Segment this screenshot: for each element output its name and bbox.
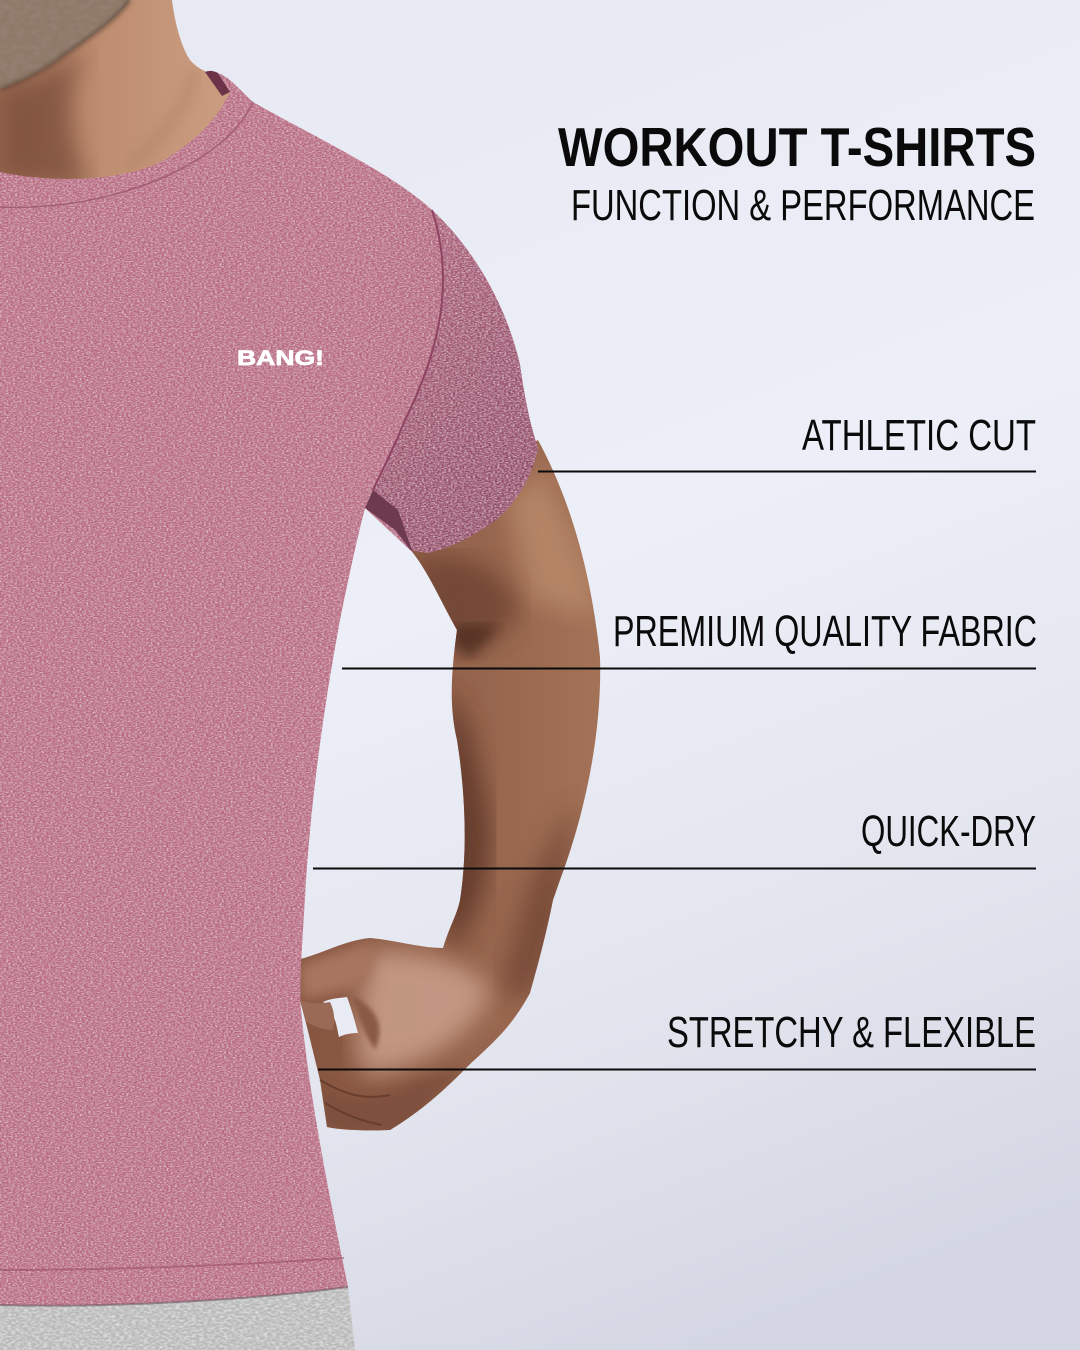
sleeve seam xyxy=(373,210,443,490)
index finger xyxy=(300,945,373,1000)
beard xyxy=(0,0,130,89)
thumb base xyxy=(352,995,379,1050)
forearm and hand xyxy=(290,430,610,1140)
finger creases xyxy=(320,1080,390,1125)
logo: BANG! xyxy=(237,347,324,370)
back of collar xyxy=(205,71,230,96)
shorts xyxy=(0,1287,355,1350)
finger gap xyxy=(323,997,358,1037)
upper arm highlight xyxy=(505,470,596,620)
under-sleeve fold xyxy=(365,490,413,553)
t-shirt xyxy=(0,71,538,1306)
lower hand shadow xyxy=(321,1070,464,1130)
forearm inner shadow xyxy=(440,690,491,950)
elbow crook shadow xyxy=(410,557,520,650)
sleeve xyxy=(373,210,538,553)
hem seam xyxy=(0,1258,344,1270)
photo: model xyxy=(0,0,610,1350)
neck and chin xyxy=(0,0,230,179)
collar seam xyxy=(0,102,253,207)
back of hand highlight xyxy=(356,950,490,1075)
forearm outer shadow xyxy=(500,800,575,1000)
